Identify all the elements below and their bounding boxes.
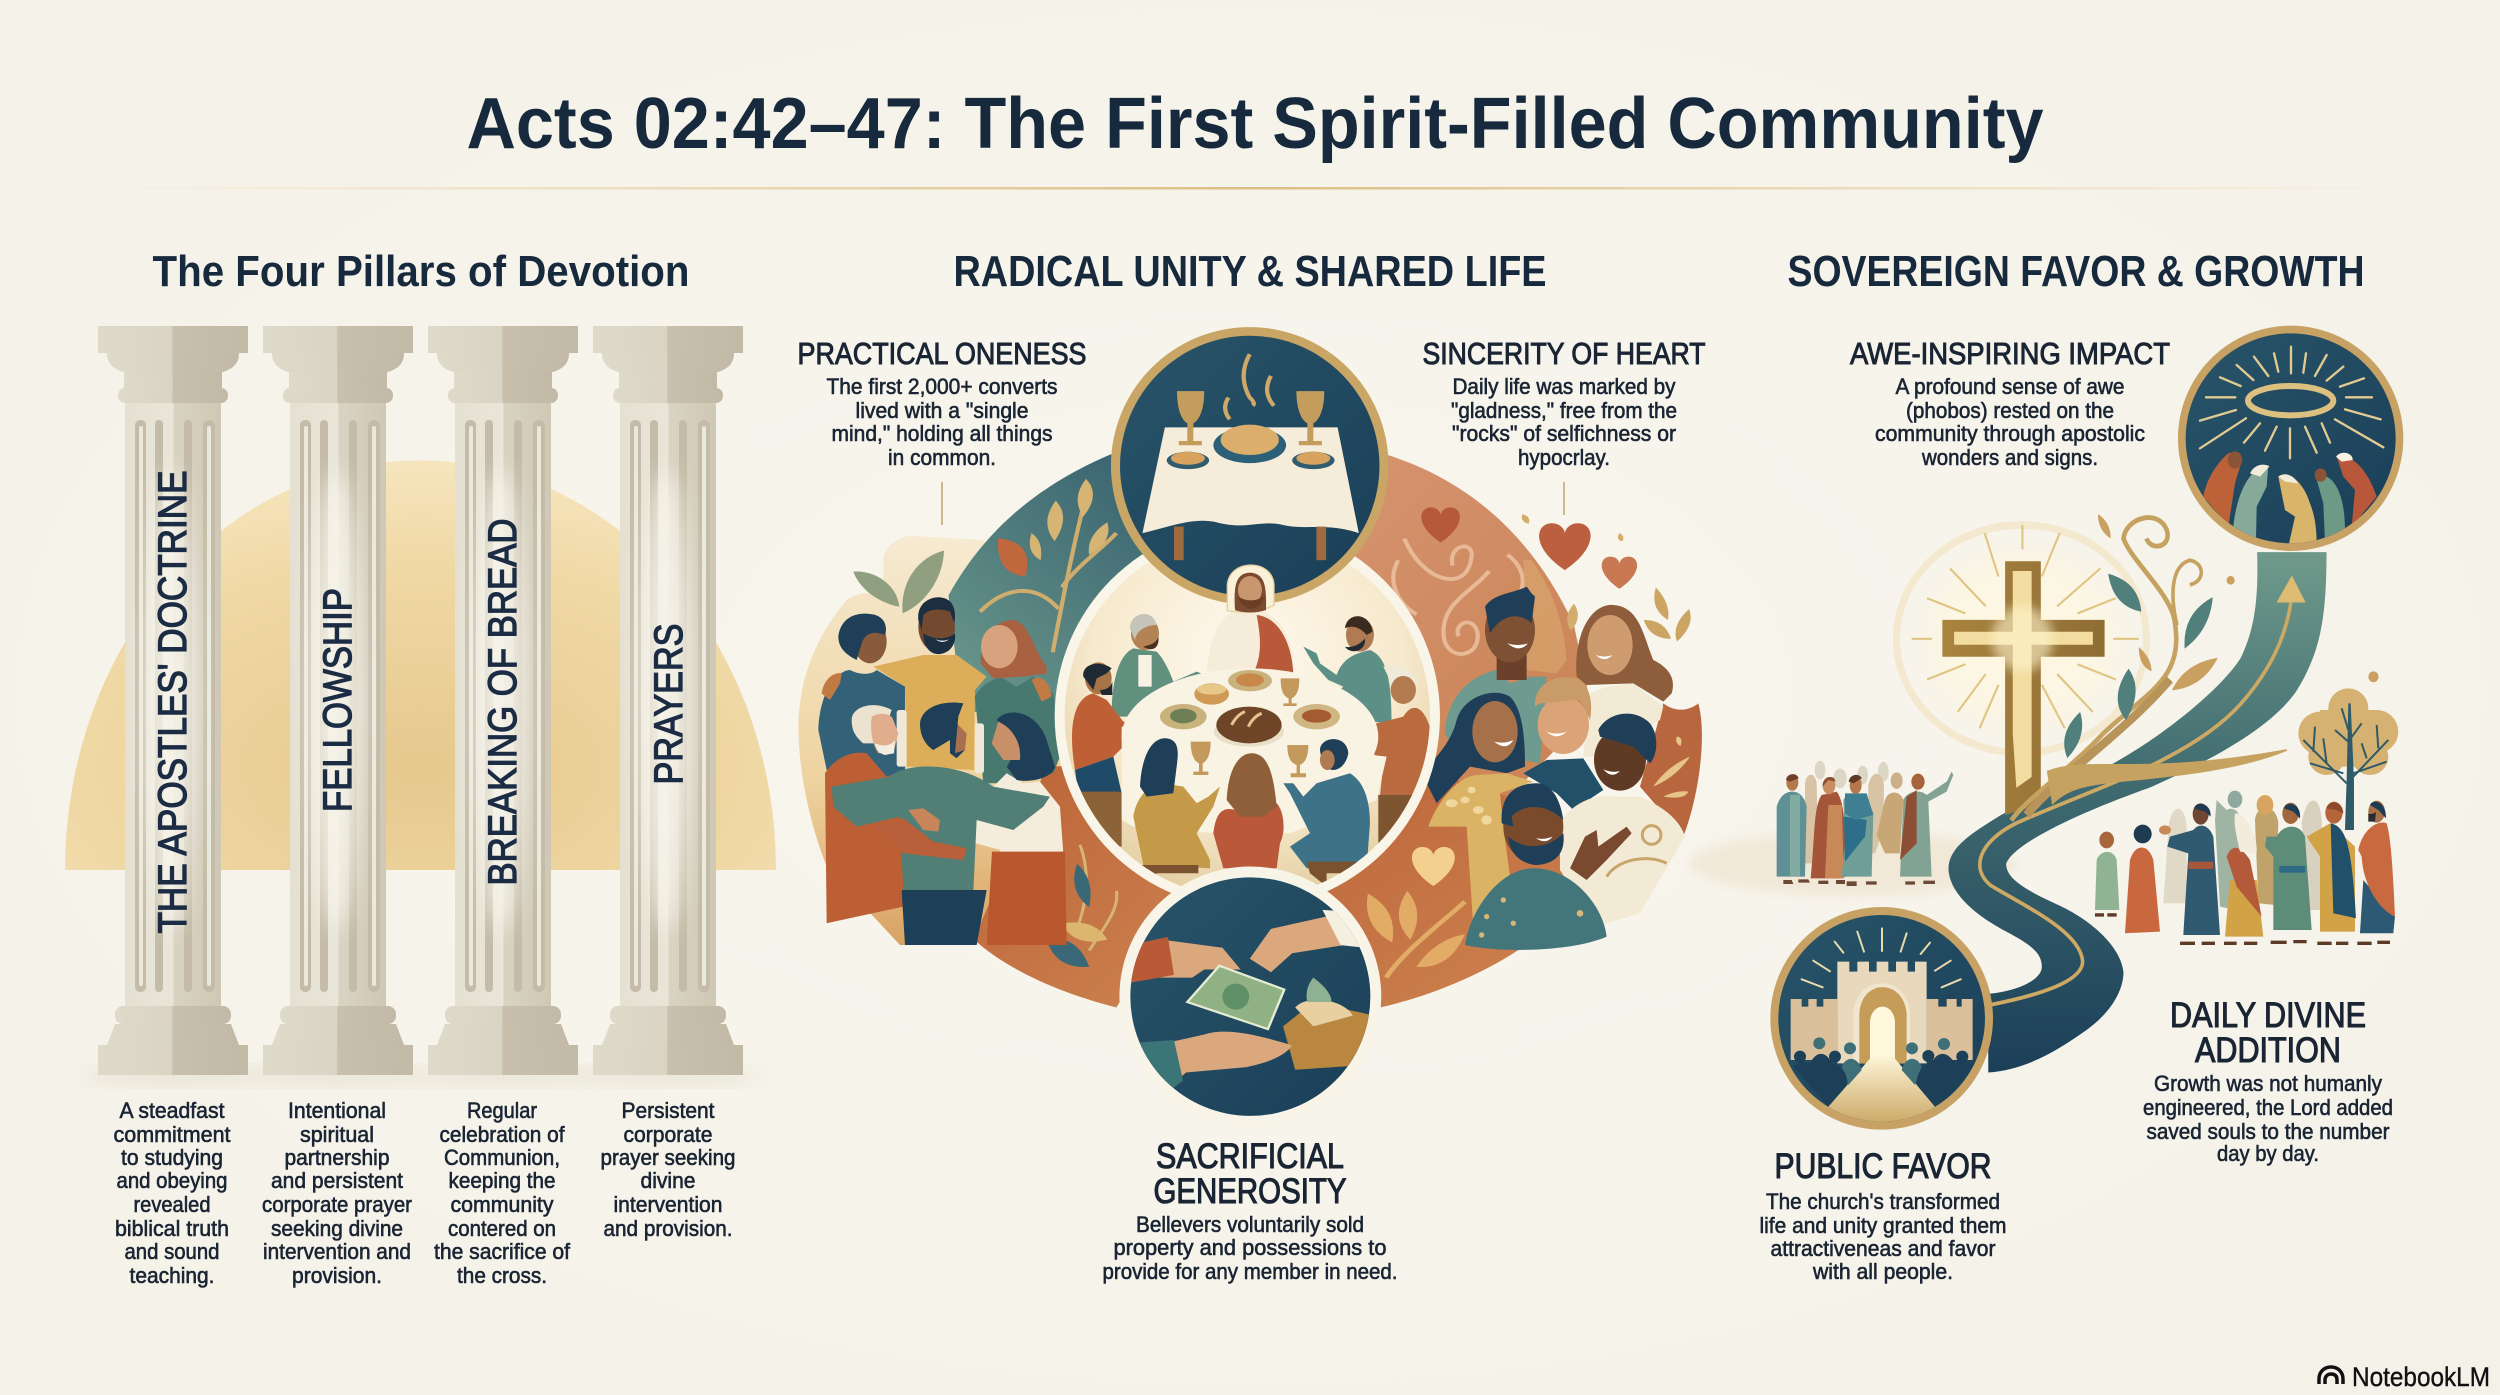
description: doctrine: and obeying [116, 1168, 228, 1193]
text: public favor: life and unity granted them [1760, 1213, 2006, 1238]
panel: sovereign favor and growth [1690, 247, 2403, 1284]
description: fellowship: corporate prayer [262, 1192, 412, 1217]
ground wash [1690, 831, 2016, 896]
glowing cross [1942, 561, 2105, 815]
text: sincerity of heart [1451, 374, 1677, 470]
description: doctrine: A steadfast [120, 1098, 224, 1123]
pillar label: doctrine: THE APOSTLES' DOCTRINE [151, 470, 195, 934]
description: fellowship [262, 1098, 412, 1288]
heading: radical unity: RADICAL UNITY & SHARED LIFE [954, 247, 1546, 296]
text: public favor: with all people. [1812, 1259, 1953, 1284]
description: doctrine: revealed [134, 1192, 210, 1217]
text: practical oneness: in common. [888, 445, 996, 470]
text: awe-inspiring impact [1875, 374, 2145, 470]
subheading: sacrificial generosity: SACRIFICIAL [1156, 1137, 1344, 1176]
right lobe arcs [1250, 454, 1629, 1007]
joyful people [1423, 560, 1702, 950]
description: prayers: divine [640, 1168, 696, 1193]
jesus with halo [1227, 565, 1274, 612]
heading: four pillars: The Four Pillars of Devotion [152, 247, 690, 296]
text: daily divine addition [2143, 1071, 2393, 1166]
river, cross and vine [1690, 514, 2379, 1072]
pillar: fellowship [246, 326, 430, 1084]
text: sacrificial generosity: property and possessions to [1114, 1235, 1386, 1260]
text: practical oneness: mind," holding all things [832, 421, 1052, 446]
description: fellowship: spiritual [300, 1122, 374, 1147]
text: sacrificial generosity: provide for any member in need. [1102, 1259, 1398, 1284]
panel: radical unity and shared life [798, 247, 1706, 1284]
subheading: daily divine addition [2170, 996, 2366, 1070]
description: breaking of bread: the sacrifice of [434, 1239, 571, 1264]
description: fellowship: partnership [284, 1145, 390, 1170]
text: sincerity of heart: "rocks" of selfichness or [1452, 421, 1676, 446]
text: practical oneness [826, 374, 1058, 470]
text: sacrificial generosity [1102, 1212, 1398, 1284]
pillar label: fellowship: FELLOWSHIP [316, 588, 360, 812]
subheading: sacrificial generosity: GENEROSITY [1154, 1172, 1346, 1211]
text: sincerity of heart: "gladness," free from the [1451, 398, 1677, 423]
top circle: awe and halo [2178, 326, 2403, 551]
text: daily divine addition: Growth was not humanly [2154, 1071, 2382, 1096]
text: sincerity of heart: Daily life was marked by [1452, 374, 1676, 399]
left lobe background [798, 536, 1067, 945]
description: fellowship: and persistent [271, 1168, 403, 1193]
text: awe-inspiring impact: community through apostolic [1875, 421, 2145, 446]
text: daily divine addition: saved souls to the number [2146, 1119, 2390, 1144]
description: fellowship: intervention and [263, 1239, 411, 1264]
text: sincerity of heart: hypocrlay. [1518, 445, 1610, 470]
description: prayers [600, 1098, 736, 1241]
teal arc with leaves [948, 454, 1250, 712]
text: sacrificial generosity: Bellevers voluntarily sold [1136, 1212, 1364, 1237]
unity illustration [798, 327, 1702, 1127]
text: public favor [1760, 1189, 2006, 1284]
subheading: sincerity of heart: SINCERITY OF HEART [1422, 336, 1706, 371]
pillar: the apostles' doctrine [81, 326, 265, 1084]
cross halo [1896, 525, 2146, 753]
pillar label: breaking of bread: BREAKING OF BREAD [481, 518, 525, 886]
pillar: prayers [576, 326, 760, 1084]
description: breaking of bread: the cross. [457, 1263, 547, 1288]
description: doctrine [114, 1098, 230, 1288]
text: public favor: The church's transformed [1766, 1189, 2000, 1214]
pillar label: prayers: PRAYERS [647, 624, 691, 784]
bottom circle: giving hands [1119, 866, 1381, 1127]
text: public favor: attractiveneas and favor [1770, 1236, 1996, 1261]
growth illustration [1690, 326, 2403, 1133]
description: doctrine: commitment [114, 1122, 230, 1147]
title: Acts 02:42–47: The First Spirit-Filled Community [466, 84, 2044, 164]
subheading: public favor: PUBLIC FAVOR [1774, 1147, 1992, 1186]
top circle: communion table [1111, 327, 1389, 605]
terracotta lower arc [974, 766, 1250, 1007]
rising sun backdrop [65, 460, 776, 870]
text: practical oneness: lived with a "single [856, 398, 1028, 423]
description: fellowship: provision. [292, 1263, 382, 1288]
description: breaking of bread: contered on [448, 1216, 556, 1241]
description: prayers: corporate [624, 1122, 712, 1147]
description: breaking of bread: keeping the [448, 1168, 556, 1193]
central fellowship circle [1054, 554, 1440, 893]
text: daily divine addition: day by day. [2217, 1141, 2319, 1166]
description: doctrine: biblical truth [115, 1216, 229, 1241]
crowd: added believers and tree [2095, 688, 2398, 945]
description: prayers: Persistent [622, 1098, 714, 1123]
text: awe-inspiring impact: A profound sense of awe [1896, 374, 2124, 399]
description: prayers: and provision. [604, 1216, 732, 1241]
description: doctrine: and sound [124, 1239, 220, 1264]
description: prayers: intervention [614, 1192, 722, 1217]
crowd: onlookers [1777, 761, 1953, 886]
pillar: breaking of bread [411, 326, 595, 1084]
subheading: awe-inspiring impact: AWE-INSPIRING IMPACT [1850, 336, 2170, 371]
subheading: sacrificial generosity [1154, 1137, 1346, 1211]
description: prayers: prayer seeking [600, 1145, 736, 1170]
description: breaking of bread: community [450, 1192, 554, 1217]
lobe colour arcs [948, 454, 1691, 1007]
text: practical oneness: The first 2,000+ converts [826, 374, 1058, 399]
text: awe-inspiring impact: (phobos) rested on the [1906, 398, 2114, 423]
description: fellowship: seeking divine [271, 1216, 403, 1241]
hearts [1522, 514, 1691, 642]
description: breaking of bread [434, 1098, 571, 1288]
panel: four pillars of devotion [65, 247, 776, 1288]
description: breaking of bread: Regular [467, 1098, 537, 1123]
bottom circle: city gate [1770, 907, 1993, 1133]
description: doctrine: teaching. [130, 1263, 214, 1288]
subheading: practical oneness: PRACTICAL ONENESS [798, 336, 1086, 371]
river of growth [1948, 552, 2327, 1072]
text: awe-inspiring impact: wonders and signs. [1921, 445, 2098, 470]
golden vine [2011, 514, 2379, 820]
description: fellowship: Intentional [288, 1098, 386, 1123]
people embracing [818, 597, 1067, 945]
subheading: daily divine addition: ADDITION [2195, 1031, 2341, 1070]
description: breaking of bread: Communion, [444, 1145, 560, 1170]
description: breaking of bread: celebration of [440, 1122, 565, 1147]
description: doctrine: to studying [121, 1145, 223, 1170]
subheading: daily divine addition: DAILY DIVINE [2170, 996, 2366, 1035]
heading: sovereign favor: SOVEREIGN FAVOR & GROWTH [1788, 247, 2364, 296]
text: daily divine addition: engineered, the Lord added [2143, 1095, 2393, 1120]
